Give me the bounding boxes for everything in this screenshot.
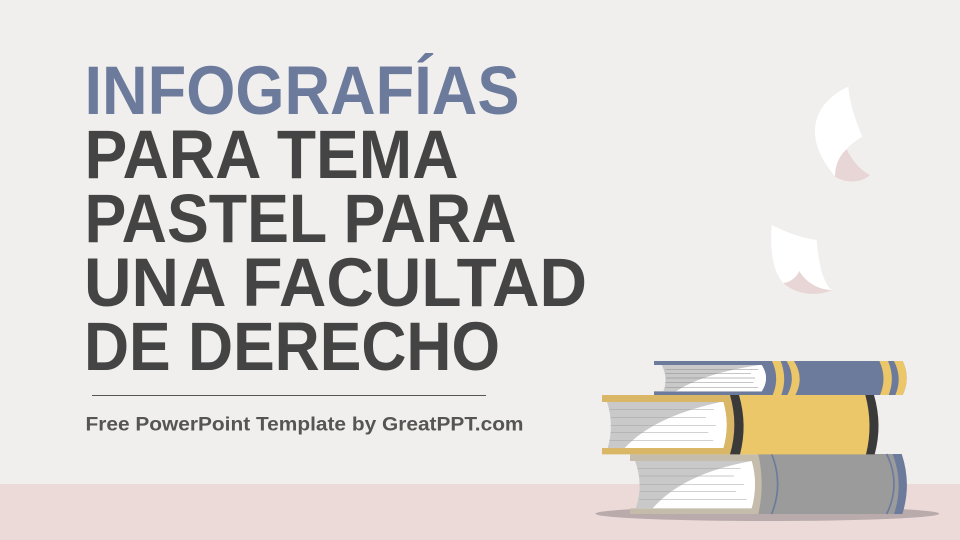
bottom book: [630, 454, 907, 514]
title line: DE DERECHO: DE DERECHO: [84, 308, 500, 385]
subtitle: Free PowerPoint Template by GreatPPT.com: [86, 414, 524, 436]
floor band: [0, 484, 960, 540]
title line: INFOGRAFÍAS: INFOGRAFÍAS: [84, 52, 520, 129]
title: [84, 52, 587, 385]
middle book: [602, 395, 879, 454]
book shadow: [595, 506, 939, 521]
illustration: stack of books: [595, 361, 939, 521]
title line: PASTEL PARA: PASTEL PARA: [84, 180, 516, 257]
title line: PARA TEMA: PARA TEMA: [84, 116, 458, 193]
top book: [654, 361, 907, 395]
icon: falling paper upper: [815, 87, 870, 181]
title line: UNA FACULTAD: UNA FACULTAD: [84, 244, 587, 321]
icon: falling paper lower: [771, 225, 832, 294]
